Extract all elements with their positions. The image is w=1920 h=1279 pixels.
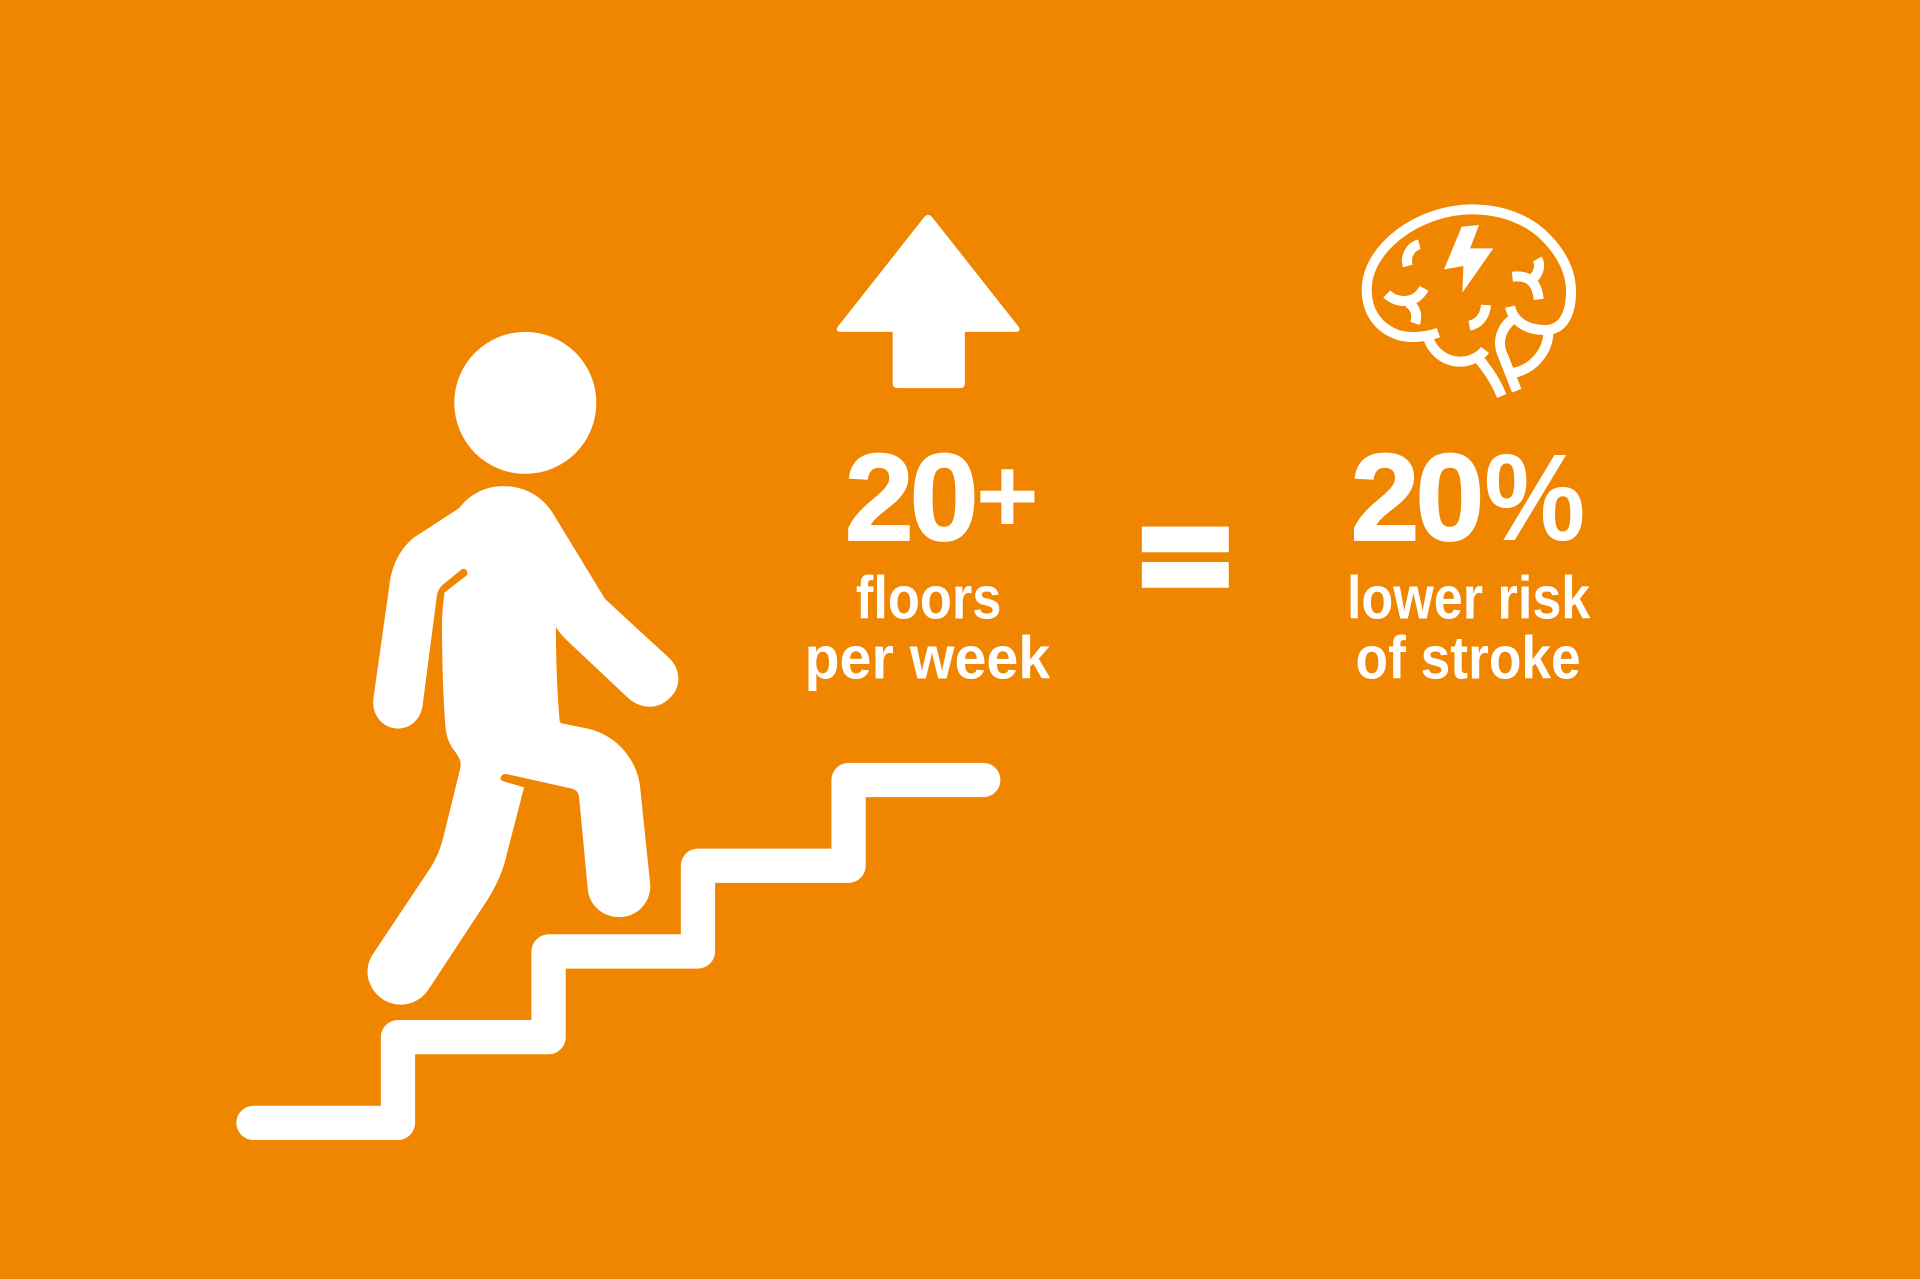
brain outline [1367, 209, 1571, 337]
equals sign [1142, 527, 1229, 588]
stat digits: 20: 20 [845, 429, 979, 567]
cerebellum [1500, 318, 1548, 391]
brain stem [1478, 358, 1502, 396]
icon: staircase [253, 780, 983, 1123]
stat digits: 20: 20 [1351, 429, 1484, 567]
stat: 20+ [845, 429, 1039, 567]
label: floors per week [804, 564, 1051, 692]
label line: lower risk: lower risk [1347, 564, 1591, 631]
label: lower risk of stroke [1347, 564, 1591, 692]
label line: floors: floors [856, 564, 1001, 631]
brain folds [1387, 244, 1539, 326]
stat percent sign: % [1484, 429, 1585, 567]
icon: up arrow [837, 215, 1020, 388]
brain lower lobe [1428, 338, 1485, 362]
person head [454, 332, 596, 474]
label line: per week: per week [804, 625, 1051, 692]
lightning bolt [1444, 225, 1493, 293]
person body [368, 486, 678, 1005]
icon: brain with lightning bolt [1367, 209, 1571, 396]
stat plus sign: + [976, 435, 1039, 556]
icon: person climbing stairs [368, 332, 678, 1005]
label line: of stroke: of stroke [1356, 626, 1581, 692]
stat: 20% [1351, 429, 1585, 567]
